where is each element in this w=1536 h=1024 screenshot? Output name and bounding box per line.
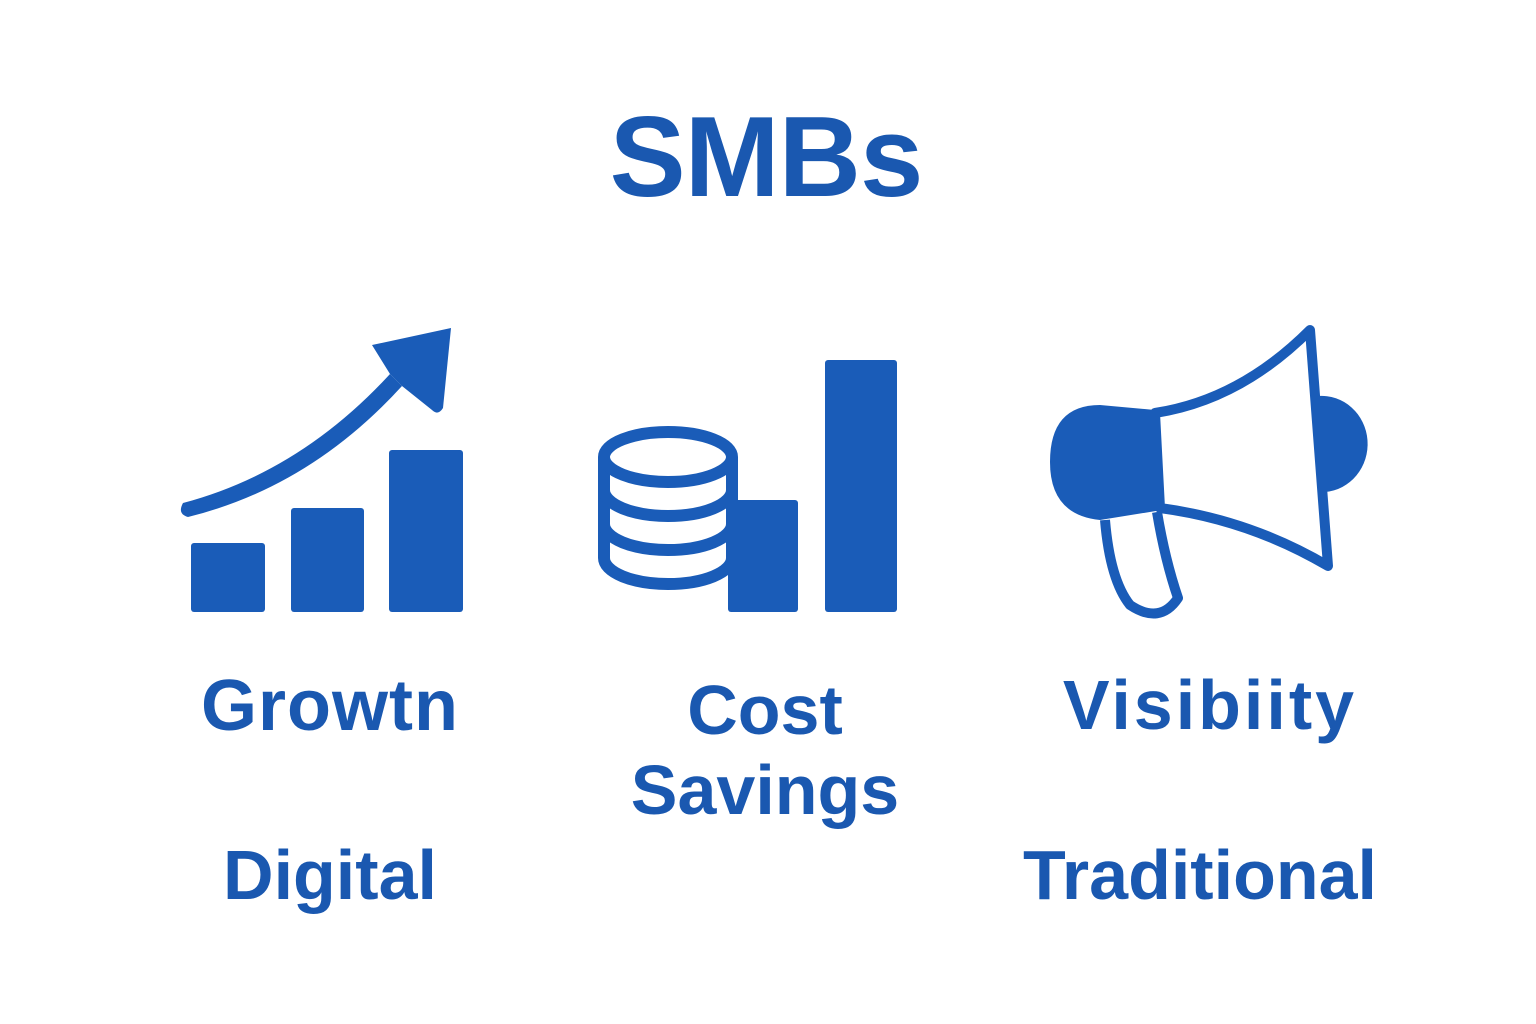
label: digital: Digital	[223, 836, 437, 914]
label: cost savings: Savings	[631, 751, 899, 829]
label: traditional: Traditional	[1023, 836, 1377, 914]
label: growth: Growtn	[201, 666, 459, 746]
label: cost savings	[631, 671, 899, 829]
label: cost savings: Cost	[687, 671, 843, 749]
icon: growth chart	[181, 328, 463, 612]
title: SMBs	[610, 94, 922, 221]
label: visibility: Visibiity	[1063, 666, 1357, 744]
icon: cost savings coins and bars	[604, 360, 897, 612]
icon: megaphone	[1050, 330, 1368, 614]
